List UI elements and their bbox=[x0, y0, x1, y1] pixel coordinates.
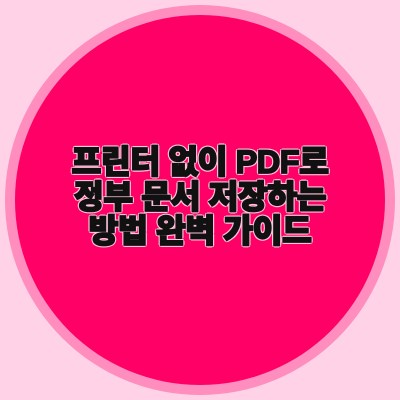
title bbox=[70, 143, 330, 249]
title: 방법 완벽 가이드 bbox=[89, 213, 311, 249]
title: 프린터 없이 PDF로 bbox=[72, 144, 328, 180]
title: 정부 문서 저장하는 bbox=[74, 178, 326, 214]
